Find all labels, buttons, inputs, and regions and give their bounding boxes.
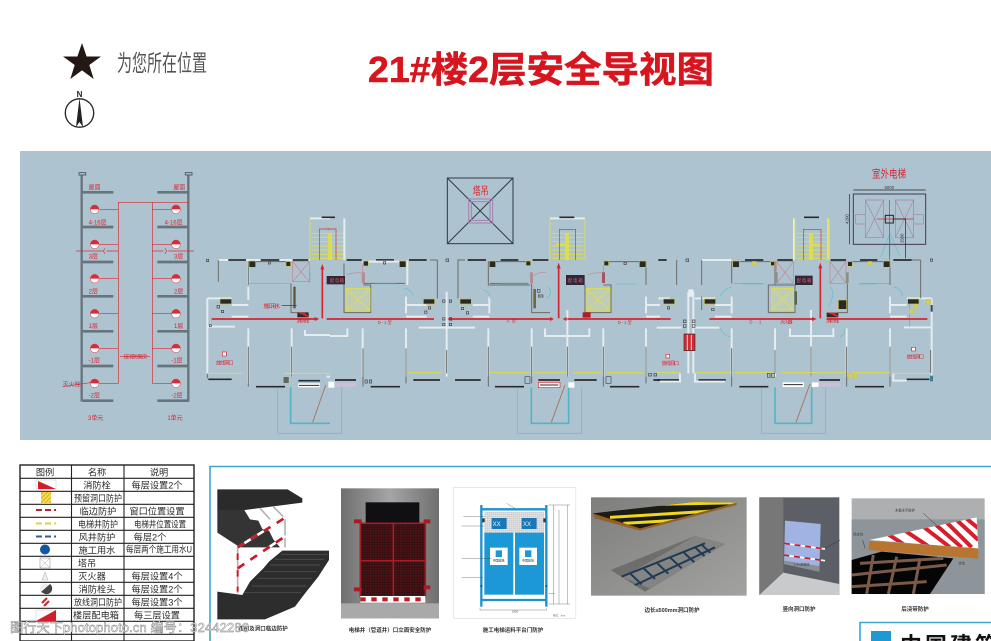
floor plan: east units: 放线洞口 bbox=[662, 360, 679, 367]
legend row: stake-out opening: 放线洞口防护 bbox=[74, 596, 122, 608]
legend row: air shaft bbox=[36, 532, 166, 542]
legend row: hose connector: 消防栓头 bbox=[79, 584, 115, 594]
riser diagram: 灭火栓 bbox=[63, 381, 81, 389]
outdoor elevator: 室外电梯 bbox=[872, 167, 906, 181]
riser diagram: 屋面 bbox=[89, 184, 101, 191]
shaft marker bbox=[684, 334, 695, 351]
outdoor elevator: 4200 bbox=[844, 214, 849, 224]
legend row: construction water: 每层两个施工用水U bbox=[126, 544, 192, 554]
title: 21#楼2层安全导视图 bbox=[368, 49, 714, 90]
riser diagram: -2层 bbox=[171, 392, 183, 399]
icon: north arrow bbox=[65, 90, 94, 127]
legend row: hydrant: 消防栓 bbox=[83, 480, 111, 490]
legend row: construction water: 施工用水 bbox=[79, 544, 115, 556]
panel: safety plan background bbox=[20, 151, 991, 440]
drawing: hoist platform door: XX bbox=[493, 522, 501, 528]
legend row: stake-out opening bbox=[42, 596, 183, 608]
outdoor elevator: 1500 bbox=[900, 233, 905, 243]
floor plan: stair core A and centre units: D-1型 bbox=[618, 319, 632, 325]
legend row: air shaft: 风井防护 bbox=[79, 532, 115, 542]
legend row: floor distribution box: 每三层设置 bbox=[134, 610, 180, 620]
company logo box bbox=[860, 622, 991, 641]
riser diagram bbox=[63, 173, 194, 422]
legend table: 名称 bbox=[88, 466, 106, 478]
drawing: hoist platform door: 中国建筑 bbox=[522, 558, 534, 563]
floor plan: east units: 灭火器 bbox=[780, 320, 793, 326]
legend row: extinguisher: 灭火器 bbox=[78, 572, 106, 582]
legend table: 图例 bbox=[36, 466, 54, 478]
legend row: edge protection bbox=[36, 506, 185, 516]
tower crane: 塔吊 bbox=[473, 184, 489, 197]
floor plan: west unit: 消防栓 bbox=[296, 318, 310, 325]
legend row: elevator shaft bbox=[36, 518, 186, 530]
legend row: reserved opening bbox=[41, 492, 122, 504]
legend row: elevator shaft: 电梯井位置设置 bbox=[134, 518, 186, 530]
riser diagram: 4-16层 bbox=[89, 219, 107, 226]
legend table: 说明 bbox=[150, 466, 168, 478]
riser diagram: 2层 bbox=[89, 288, 98, 295]
legend row: hose connector bbox=[40, 584, 183, 594]
riser diagram: 4-16层 bbox=[165, 219, 183, 226]
legend row: extinguisher: 每层设置4个 bbox=[131, 570, 183, 582]
photo: post-cast strip protection: 木坎 bbox=[958, 560, 966, 565]
hydrants bbox=[90, 205, 180, 388]
photo: vertical opening protection bbox=[759, 497, 840, 595]
legend row: extinguisher bbox=[42, 570, 183, 582]
riser diagram: -1层 bbox=[89, 358, 100, 365]
watermark: 图行天下photophoto.cn 编号：32442286 bbox=[10, 620, 249, 635]
photo: vertical opening protection: 1.8m基准线 bbox=[794, 561, 809, 566]
you-are-here label: 为您所在位置 bbox=[117, 50, 207, 76]
riser diagram: 屋面 bbox=[173, 184, 185, 191]
floor plan: stair core A and centre units: 配电箱 bbox=[568, 277, 583, 284]
floor plan: east units: 消防栓 bbox=[826, 318, 839, 325]
legend row: air shaft: 每层2个 bbox=[134, 532, 166, 542]
photo: small opening cover bbox=[591, 497, 747, 596]
caption: hoist platform door: 施工电梯运料平台门防护 bbox=[483, 626, 544, 634]
legend row: floor distribution box: 楼层配电箱 bbox=[73, 610, 119, 620]
outdoor elevator: 6000 bbox=[885, 185, 895, 190]
photo: stair edge protection bbox=[217, 489, 329, 619]
legend row: hydrant: 每层设置2个 bbox=[131, 480, 183, 490]
riser diagram: 1单元 bbox=[167, 414, 183, 422]
drawing: hoist platform door: XX bbox=[523, 522, 531, 528]
photo: post-cast strip protection: 防水坎 bbox=[853, 531, 864, 536]
floor plan: east units: 配电箱 bbox=[797, 277, 812, 284]
riser diagram: -1层 bbox=[171, 358, 183, 365]
floor plan: west unit: 施工用水 bbox=[263, 302, 280, 310]
floor plan: stair core A and centre units: D-1型 bbox=[378, 319, 392, 325]
riser diagram: 接消防泵房 bbox=[123, 353, 147, 361]
panel: protection examples frame bbox=[210, 466, 991, 641]
floor plan: west unit: 放线洞口 bbox=[216, 359, 233, 366]
tower crane bbox=[447, 178, 513, 244]
stair A bbox=[327, 218, 345, 260]
riser diagram: 3层 bbox=[174, 254, 183, 261]
legend row: construction water bbox=[40, 544, 192, 556]
photo: post-cast strip protection bbox=[852, 498, 985, 594]
legend row: tower crane: 塔吊 bbox=[78, 558, 96, 568]
legend row: stake-out opening: 每层设置3个 bbox=[131, 596, 183, 608]
legend row: reserved opening: 预留洞口防护 bbox=[74, 492, 122, 504]
legend row: hose connector: 每层设置2个 bbox=[131, 584, 183, 594]
floor plan: east units: D-1 bbox=[749, 320, 762, 325]
floor plan: stair core A and centre units bbox=[322, 178, 660, 433]
floor plan: west unit bbox=[205, 218, 330, 433]
drawing: hoist platform door bbox=[453, 487, 576, 618]
legend row: tower crane bbox=[40, 558, 96, 568]
riser diagram: 1层 bbox=[89, 323, 98, 330]
photo: elevator shaft gate bbox=[341, 488, 439, 618]
riser diagram: 2层 bbox=[174, 288, 183, 295]
legend row: edge protection: 窗口位置设置 bbox=[129, 506, 185, 516]
riser diagram: 1层 bbox=[174, 323, 183, 330]
caption: stair protection: 楼梯及洞口临边防护 bbox=[238, 624, 288, 632]
drawing: hoist platform door: 1800 bbox=[512, 610, 519, 614]
icon: you-are-here star bbox=[63, 43, 101, 79]
legend row: hydrant bbox=[36, 480, 183, 490]
floor plan: east units: 放线洞口 bbox=[907, 353, 924, 360]
drawing: hoist platform door: 单位：mm bbox=[553, 614, 566, 618]
legend table bbox=[20, 465, 194, 641]
caption: elevator shaft gate: 电梯井（管道井）口立面安全防护 bbox=[349, 626, 432, 634]
photo: post-cast strip protection: 木板水平防护 bbox=[895, 507, 916, 512]
floor plan: east units bbox=[657, 167, 933, 433]
icon: north arrow: N bbox=[77, 90, 83, 99]
outdoor elevator bbox=[844, 167, 926, 260]
legend row: floor distribution box bbox=[36, 610, 180, 621]
legend row: edge protection: 临边防护 bbox=[80, 506, 116, 516]
riser diagram: 3层 bbox=[89, 254, 98, 261]
caption: small opening: 边长≤500mm洞口防护 bbox=[645, 606, 700, 614]
floor plan: stair core A and centre units: A型 bbox=[507, 318, 517, 324]
drawing: hoist platform door: 中国建筑 bbox=[493, 558, 505, 563]
floor plan: stair core A and centre units: 配电箱 bbox=[330, 277, 345, 284]
caption: post-cast strip: 后浇带防护 bbox=[901, 605, 929, 613]
riser diagram: -2层 bbox=[89, 392, 100, 399]
legend row: elevator shaft: 电梯井防护 bbox=[78, 518, 118, 530]
riser diagram: 3单元 bbox=[88, 414, 103, 422]
caption: vertical opening: 竖向洞口防护 bbox=[782, 605, 816, 613]
